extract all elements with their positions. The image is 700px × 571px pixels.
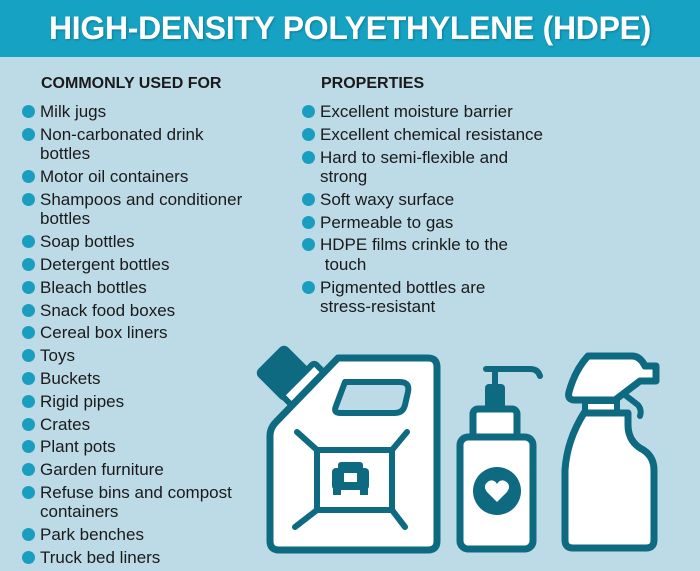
list: properties: Permeable to gas — [320, 213, 453, 232]
list: uses: Cereal box liners — [40, 323, 168, 342]
list: uses — [22, 102, 242, 567]
list: properties: Excellent chemical resistance — [320, 125, 543, 144]
list: uses: Detergent bottles — [40, 255, 169, 274]
list: properties: Soft waxy surface — [320, 190, 454, 209]
list: uses: Rigid pipes — [40, 392, 124, 411]
list: uses: Milk jugs — [40, 102, 106, 121]
list: properties — [302, 102, 543, 316]
list: uses: Refuse bins and compost — [40, 483, 232, 502]
list: properties: touch — [325, 255, 366, 274]
list: properties: Excellent moisture barrier — [320, 102, 513, 121]
list: uses: Toys — [40, 346, 75, 365]
list: properties: Pigmented bottles are — [320, 278, 485, 297]
list: properties: Hard to semi-flexible and — [320, 148, 508, 167]
list: properties: HDPE films crinkle to the — [320, 235, 508, 254]
list: properties: stress-resistant — [320, 297, 435, 316]
icon: spray bottle — [565, 356, 656, 548]
list: uses: Snack food boxes — [40, 301, 175, 320]
title: HIGH-DENSITY POLYETHYLENE (HDPE) — [49, 10, 651, 46]
list: uses: Plant pots — [40, 437, 116, 456]
list: uses: Crates — [40, 415, 90, 434]
icon: jerry can — [254, 343, 437, 550]
list: uses: Motor oil containers — [40, 167, 188, 186]
list: uses: Bleach bottles — [40, 278, 147, 297]
list: uses: bottles — [40, 144, 90, 163]
list: uses: Non-carbonated drink — [40, 125, 203, 144]
list: uses: containers — [40, 502, 118, 521]
list: uses: Shampoos and conditioner — [40, 190, 242, 209]
list: uses: Buckets — [40, 369, 100, 388]
list: uses: Park benches — [40, 525, 144, 544]
list: uses: bottles — [40, 209, 90, 228]
list: uses: Truck bed liners — [40, 548, 160, 567]
list: uses: Garden furniture — [40, 460, 164, 479]
header bar — [0, 0, 700, 57]
heading: commonly used for: COMMONLY USED FOR — [41, 75, 221, 92]
icon: soap pump bottle — [460, 369, 540, 549]
list: uses: Soap bottles — [40, 232, 135, 251]
list: properties: strong — [320, 167, 367, 186]
heading: properties: PROPERTIES — [321, 75, 424, 92]
